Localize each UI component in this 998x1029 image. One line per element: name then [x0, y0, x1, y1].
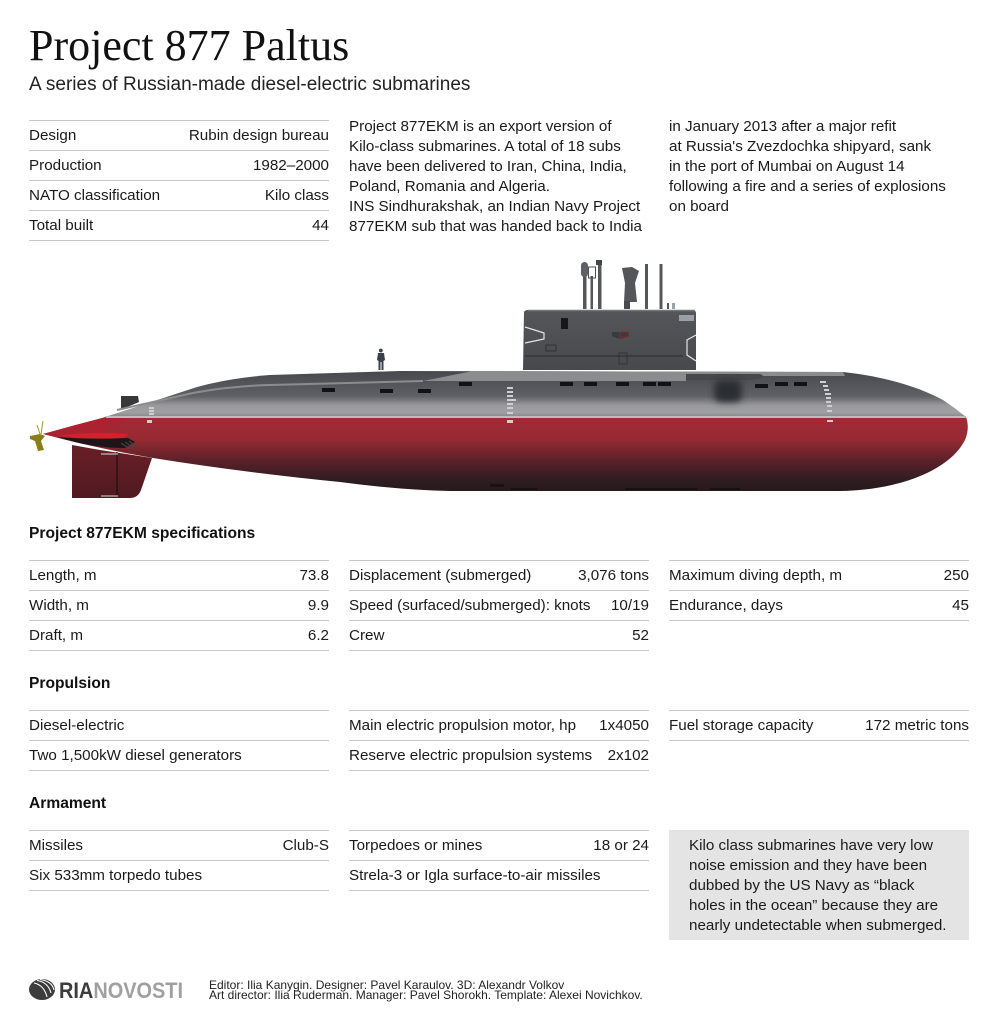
- table: propulsion column 3: Fuel storage capacity: [669, 717, 813, 734]
- table: armament column 1: Missiles: [29, 837, 83, 854]
- propeller: [30, 421, 45, 451]
- table: armament column 1: [29, 830, 329, 891]
- sail and masts: [523, 260, 696, 370]
- heading: armament: Armament: [29, 795, 106, 812]
- table: specifications column 1: 6.2: [308, 627, 329, 644]
- person on deck: [377, 349, 385, 370]
- subtitle: A series of Russian-made diesel-electric submarines: [29, 74, 470, 95]
- table: armament column 2: 18 or 24: [593, 837, 649, 854]
- hull lower red: [43, 417, 968, 491]
- table: specifications column 2: Displacement (submerged): [349, 567, 531, 584]
- table: specifications column 2: 3,076 tons: [578, 567, 649, 584]
- table: armament column 2: Strela-3 or Igla surface-to-air missiles: [349, 867, 601, 884]
- table: general data: NATO classification: [29, 187, 160, 204]
- table: specifications column 3: 45: [952, 597, 969, 614]
- text block: intro column 2: on board: [669, 198, 729, 215]
- title: Project 877 Paltus: [29, 21, 349, 70]
- text block: intro column 1: have been delivered to Iran, China, India,: [349, 158, 627, 175]
- table: specifications column 2: 10/19: [611, 597, 649, 614]
- text block: intro column 2: following a fire and a series of explosions: [669, 178, 946, 195]
- text block: intro column 1: INS Sindhurakshak, an Indian Navy Project: [349, 198, 640, 215]
- submarine illustration: [30, 260, 968, 498]
- table: general data: Design: [29, 127, 76, 144]
- sail dark shadow on hull: [714, 380, 742, 402]
- table: propulsion column 1: Diesel-electric: [29, 717, 124, 734]
- draft marks: [147, 381, 833, 423]
- table: specifications column 1: Length, m: [29, 567, 97, 584]
- table: general data: Total built: [29, 217, 93, 234]
- table: specifications column 2: Crew: [349, 627, 384, 644]
- table: specifications column 1: 73.8: [299, 567, 329, 584]
- table: propulsion column 3: [669, 710, 969, 741]
- rudder block: [121, 396, 139, 408]
- table: specifications column 2: Speed (surfaced/submerged): knots: [349, 597, 590, 614]
- table: general data: 1982–2000: [253, 157, 329, 174]
- hull windows: [322, 382, 807, 393]
- credits: Editor: Ilia Kanygin. Designer: Pavel Karaulov. 3D: Alexandr Volkov: [209, 978, 564, 992]
- text block: intro column 1: 877EKM sub that was handed back to India: [349, 218, 642, 235]
- table: propulsion column 2: 2x102: [608, 747, 649, 764]
- table: propulsion column 1: Two 1,500kW diesel generators: [29, 747, 242, 764]
- hull upper grey: [105, 371, 966, 417]
- callout: black holes note: holes in the ocean” because they are: [689, 897, 938, 914]
- table: general data: [29, 120, 329, 241]
- text block: intro column 2: in January 2013 after a major refit: [669, 118, 896, 135]
- table: armament column 2: [349, 830, 649, 891]
- table: specifications column 1: Draft, m: [29, 627, 83, 644]
- table: armament column 2: Torpedoes or mines: [349, 837, 482, 854]
- table: propulsion column 1: [29, 710, 329, 771]
- masts: [581, 260, 675, 309]
- table: general data: Rubin design bureau: [189, 127, 329, 144]
- table: general data: Production: [29, 157, 102, 174]
- table: propulsion column 2: Main electric propulsion motor, hp: [349, 717, 576, 734]
- logo: RIA Novosti: [29, 978, 183, 1002]
- credits: [209, 978, 643, 1002]
- table: armament column 1: Club-S: [283, 837, 329, 854]
- table: propulsion column 2: 1x4050: [599, 717, 649, 734]
- icon: logo globe: [29, 979, 55, 1000]
- table: specifications column 3: [669, 560, 969, 621]
- table: general data: 44: [312, 217, 329, 234]
- table: specifications column 1: Width, m: [29, 597, 89, 614]
- text block: intro column 1: Project 877EKM is an export version of: [349, 118, 612, 135]
- table: specifications column 2: [349, 560, 649, 651]
- table: specifications column 1: [29, 560, 329, 651]
- deck casing: [423, 371, 845, 381]
- callout: black holes note: nearly undetectable when submerged.: [689, 917, 947, 934]
- table: propulsion column 2: [349, 710, 649, 771]
- text block: intro column 2: in the port of Mumbai on August 14: [669, 158, 905, 175]
- heading: specifications: Project 877EKM specifications: [29, 525, 255, 542]
- text block: intro column 1: Kilo-class submarines. A total of 18 subs: [349, 138, 621, 155]
- table: propulsion column 3: 172 metric tons: [865, 717, 969, 734]
- callout: black holes note: Kilo class submarines have very low: [689, 837, 933, 854]
- text block: intro column 1: [349, 118, 642, 235]
- credits: Art director: Ilia Ruderman. Manager: Pavel Shorokh. Template: Alexei Novichkov.: [209, 988, 643, 1002]
- table: specifications column 1: 9.9: [308, 597, 329, 614]
- text block: intro column 2: at Russia's Zvezdochka shipyard, sank: [669, 138, 931, 155]
- table: general data: Kilo class: [265, 187, 329, 204]
- text block: intro column 1: Poland, Romania and Algeria.: [349, 178, 550, 195]
- table: specifications column 2: 52: [632, 627, 649, 644]
- heading: propulsion: Propulsion: [29, 675, 110, 692]
- callout: black holes note: dubbed by the US Navy as “black: [689, 877, 914, 894]
- keel marks: [490, 484, 740, 490]
- callout: black holes note: noise emission and they have been: [689, 857, 927, 874]
- table: specifications column 3: Maximum diving depth, m: [669, 567, 842, 584]
- bright red stern: [43, 417, 137, 449]
- table: propulsion column 2: Reserve electric propulsion systems: [349, 747, 592, 764]
- waterline stripe: [106, 416, 966, 418]
- table: armament column 1: Six 533mm torpedo tubes: [29, 867, 202, 884]
- text block: intro column 2: [669, 118, 946, 215]
- table: specifications column 3: Endurance, days: [669, 597, 783, 614]
- stern stabilizer fin: [72, 445, 152, 498]
- callout: black holes note: [669, 830, 969, 940]
- table: specifications column 3: 250: [944, 567, 969, 584]
